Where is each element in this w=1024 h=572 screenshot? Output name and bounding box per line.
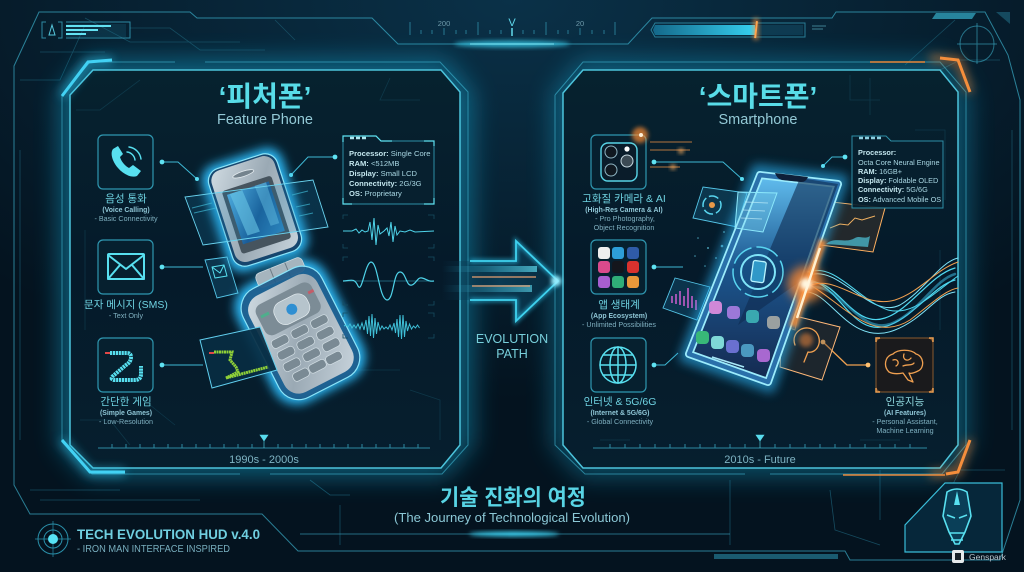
feature: camera: 고화질 카메라 & AI <box>582 193 666 205</box>
feature: camera <box>582 127 692 232</box>
hologram panel: snake game <box>200 327 277 388</box>
energy waves <box>805 258 958 333</box>
top glow line <box>454 40 570 48</box>
heading: smartphone: ‘스마트폰’ <box>699 81 817 112</box>
feature: voice calling: 음성 통화 <box>105 193 147 205</box>
left panel glow <box>58 58 474 478</box>
timeline: 2010s: 2010s - Future <box>724 454 796 466</box>
feature: camera: (High-Res Camera & AI) <box>585 207 663 214</box>
spec box: smartphone: Octa Core Neural Engine <box>858 158 940 167</box>
feature: SMS <box>84 240 168 320</box>
spec box: feature phone: Processor: Single Core <box>349 149 430 158</box>
top gauge: V <box>508 17 516 29</box>
feature: AI: Machine Learning <box>876 426 934 435</box>
smartphone <box>689 173 838 382</box>
feature: simple games: 간단한 게임 <box>100 395 152 408</box>
feature: apps: 앱 생태계 <box>598 299 640 311</box>
label: evolution path: EVOLUTION <box>476 332 548 346</box>
flip phone glow <box>198 144 375 414</box>
brand: tech evolution HUD: - IRON MAN INTERFACE INSPIRED <box>77 544 230 555</box>
iron man emblem <box>905 483 1002 552</box>
spec box: feature phone <box>343 136 434 204</box>
feature: apps: (App Ecosystem) <box>591 313 647 320</box>
feature: voice calling: (Voice Calling) <box>102 207 150 214</box>
watermark: genspark <box>952 550 1007 563</box>
top gauge: 20 <box>576 19 584 28</box>
label: evolution path <box>476 332 548 361</box>
feature: internet: - Global Connectivity <box>587 417 654 426</box>
panel: feature phone <box>62 60 468 474</box>
feature: AI <box>872 338 938 435</box>
feature: voice calling: - Basic Connectivity <box>94 214 158 223</box>
spec box: smartphone: OS: Advanced Mobile OS <box>858 195 941 204</box>
connectors <box>160 155 337 367</box>
arrow: evolution path <box>440 241 561 321</box>
top gauge <box>410 17 615 36</box>
spec box: smartphone: Processor: <box>858 148 896 157</box>
timeline: 1990s <box>98 435 430 466</box>
spec box: smartphone: Connectivity: 5G/6G <box>858 185 928 194</box>
bottom hash strip <box>714 554 838 559</box>
heading: feature phone: Feature Phone <box>217 112 313 128</box>
signal chart 1 <box>343 215 434 248</box>
timeline: 1990s: 1990s - 2000s <box>229 454 299 466</box>
signal chart 3 <box>343 313 434 339</box>
feature: internet: 인터넷 & 5G/6G <box>584 396 656 408</box>
feature: camera: Object Recognition <box>594 223 654 232</box>
energy burst <box>788 240 824 327</box>
hologram panel: orange chart <box>783 198 885 252</box>
heading: smartphone: Smartphone <box>718 112 798 128</box>
feature: internet: (Internet & 5G/6G) <box>591 410 649 417</box>
particle field <box>694 231 741 283</box>
feature: apps: - Unlimited Possibilities <box>582 320 656 329</box>
heading: feature phone: ‘피처폰’ <box>219 81 311 112</box>
hologram panel: SMS <box>205 257 238 298</box>
spec box: feature phone: Display: Small LCD <box>349 169 417 178</box>
feature: AI: 인공지능 <box>886 396 925 408</box>
hologram panel: rear <box>772 252 810 330</box>
spec box: feature phone: Connectivity: 2G/3G <box>349 179 422 188</box>
feature: SMS: - Text Only <box>109 311 144 320</box>
feature: internet <box>584 338 656 426</box>
timeline: 2010s <box>593 435 927 466</box>
feature: simple games: (Simple Games) <box>100 410 152 417</box>
top-left status widget <box>42 22 130 38</box>
hologram panel: bar chart <box>663 278 710 320</box>
label: evolution path: PATH <box>496 347 528 361</box>
feature: AI: - Personal Assistant, <box>872 417 938 426</box>
spec box: feature phone: OS: Proprietary <box>349 189 402 198</box>
hologram panel: interface <box>185 180 328 245</box>
feature: simple games: - Low-Resolution <box>99 417 153 426</box>
journey title <box>394 485 630 525</box>
panel: smartphone <box>555 58 970 475</box>
feature: apps <box>582 240 656 329</box>
spec box: smartphone: RAM: 16GB+ <box>858 167 902 176</box>
hologram panel: brain <box>780 313 840 380</box>
feature: simple games <box>98 338 153 426</box>
smartphone glow <box>685 170 842 387</box>
right panel glow <box>551 58 970 478</box>
feature: SMS: 문자 메시지 (SMS) <box>84 299 168 311</box>
brand: tech evolution HUD <box>35 521 260 557</box>
hologram panel: left dial <box>693 187 747 227</box>
heading: feature phone <box>217 81 313 128</box>
flip phone <box>205 150 367 407</box>
brand: tech evolution HUD: TECH EVOLUTION HUD v.4.0 <box>77 526 260 542</box>
bottom glow line <box>300 532 730 536</box>
spec box: smartphone <box>852 136 943 208</box>
feature: AI: (AI Features) <box>884 410 926 417</box>
signal chart 2 <box>343 257 434 305</box>
spec box: feature phone: RAM: <512MB <box>349 159 399 168</box>
journey title: (The Journey of Technological Evolution) <box>394 510 630 525</box>
feature: voice calling <box>94 135 158 223</box>
heading: smartphone <box>699 81 817 128</box>
top-right crosshair <box>932 12 1010 64</box>
top gauge: 200 <box>438 19 450 28</box>
feature: camera: - Pro Photography, <box>595 214 655 223</box>
spec box: smartphone: Display: Foldable OLED <box>858 176 938 185</box>
connectors <box>652 155 870 367</box>
journey title: 기술 진화의 여정 <box>440 485 586 510</box>
progress bar <box>651 18 826 40</box>
watermark: genspark: Genspark <box>969 552 1007 562</box>
